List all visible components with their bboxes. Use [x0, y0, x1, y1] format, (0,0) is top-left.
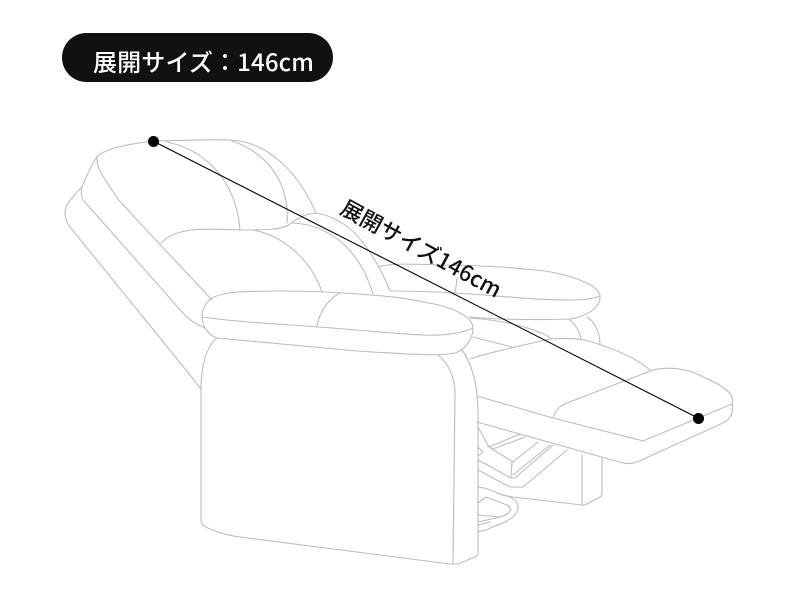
end point [693, 413, 704, 424]
far armrest [378, 264, 600, 345]
heading pill: unfolded size: 展開サイズ：146cm [93, 43, 314, 78]
seat and leg rest [470, 318, 733, 464]
chair side panel [201, 338, 478, 564]
measurement line with end points [148, 136, 704, 424]
backrest and headrest [65, 140, 390, 389]
start point [148, 136, 159, 147]
near armrest [202, 291, 473, 355]
rotated measurement label: 展開サイズ146cm [335, 191, 508, 304]
reclining mechanism [478, 427, 602, 532]
heading pill: unfolded size [62, 33, 333, 82]
line drawing: recliner chair [65, 140, 733, 564]
